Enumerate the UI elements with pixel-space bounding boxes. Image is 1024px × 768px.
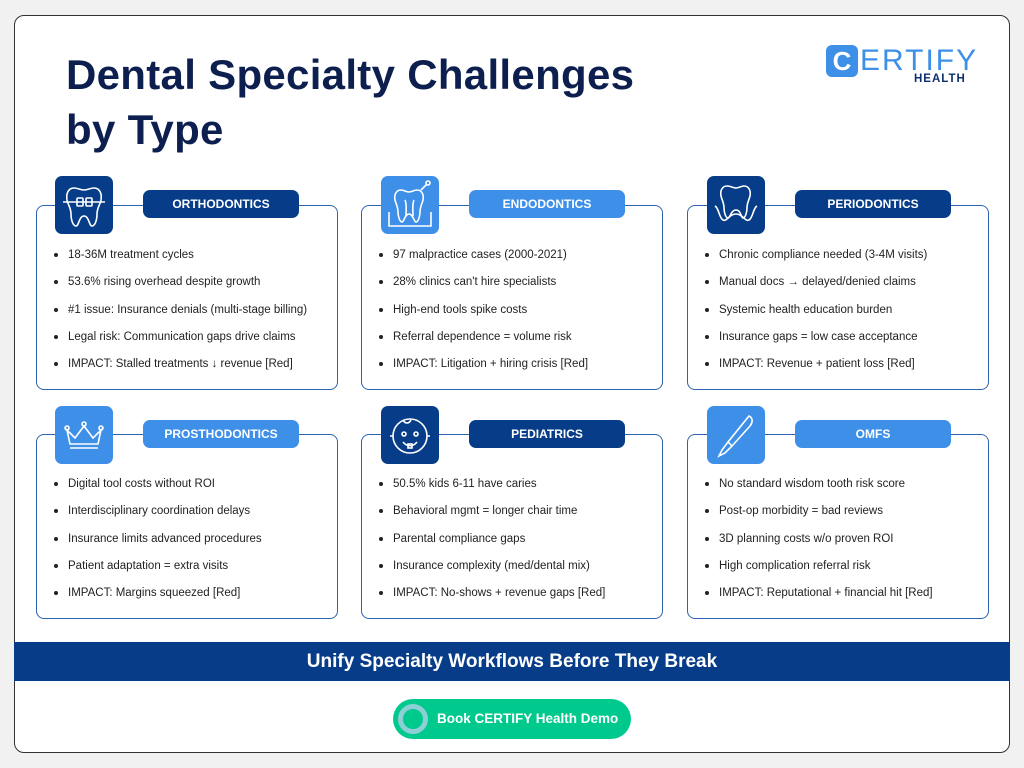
panel: pediatrics: Behavioral mgmt = longer chair time [393,505,577,517]
logo [826,44,978,85]
panel: endodontics [361,205,663,390]
icon: crown [55,406,113,464]
pill: prosthodontics [143,420,299,448]
icon: braces tooth [55,176,113,234]
pill: orthodontics: ORTHODONTICS [172,197,270,211]
panel: periodontics: Manual docs → delayed/denied claims [719,276,916,288]
panel: prosthodontics [36,434,338,619]
panel: OMFS: Post-op morbidity = bad reviews [719,505,883,517]
icon: scalpel [707,406,765,464]
banner: Unify Specialty Workflows Before They Break [307,651,717,672]
title [66,51,634,153]
panel: endodontics: High-end tools spike costs [393,304,527,316]
panel: orthodontics [36,205,338,390]
logo: HEALTH [914,73,966,85]
panel: prosthodontics: Insurance limits advanced procedures [68,533,262,545]
pill: endodontics: ENDODONTICS [503,197,591,211]
panel: orthodontics: 18-36M treatment cycles [68,249,194,261]
panel: OMFS: 3D planning costs w/o proven ROI [719,533,894,545]
pill: orthodontics [143,190,299,218]
pill: pediatrics: PEDIATRICS [511,427,583,441]
panel: periodontics: IMPACT: Revenue + patient loss [Red] [719,358,915,370]
panel: OMFS: No standard wisdom tooth risk score [719,478,905,490]
icon: root canal [381,176,439,234]
panel: pediatrics: Insurance complexity (med/dental mix) [393,560,590,572]
title: Dental Specialty Challenges [66,51,634,98]
panel: OMFS [687,434,989,619]
panel: endodontics: Referral dependence = volume risk [393,331,572,343]
panel: periodontics: Systemic health education burden [719,304,892,316]
panel: endodontics: 28% clinics can't hire specialists [393,276,556,288]
pill: endodontics [469,190,625,218]
panel: prosthodontics: IMPACT: Margins squeezed [Red] [68,587,240,599]
panel: periodontics: Insurance gaps = low case acceptance [719,331,918,343]
pill: OMFS: OMFS [856,427,890,441]
panel: pediatrics [361,434,663,619]
panel: pediatrics: Parental compliance gaps [393,533,525,545]
banner [14,642,1010,681]
panel: prosthodontics: Interdisciplinary coordination delays [68,505,250,517]
panel: orthodontics: Legal risk: Communication gaps drive claims [68,331,296,343]
pill: pediatrics [469,420,625,448]
button: book demo [393,699,631,739]
panel: prosthodontics: Digital tool costs without ROI [68,478,215,490]
panel: OMFS: High complication referral risk [719,560,870,572]
title: by Type [66,106,224,153]
panel: orthodontics: 53.6% rising overhead despite growth [68,276,260,288]
panel: prosthodontics: Patient adaptation = extra visits [68,560,228,572]
panel: endodontics: 97 malpractice cases (2000-2021) [393,249,567,261]
icon: gum tooth [707,176,765,234]
panel: OMFS: IMPACT: Reputational + financial hit [Red] [719,587,933,599]
icon: child face [381,406,439,464]
button: book demo: Book CERTIFY Health Demo [437,711,618,726]
panel: orthodontics: #1 issue: Insurance denials (multi-stage billing) [68,304,307,316]
logo: C [833,46,851,76]
pill: periodontics: PERIODONTICS [827,197,919,211]
pill: prosthodontics: PROSTHODONTICS [164,427,278,441]
panel: pediatrics: IMPACT: No-shows + revenue gaps [Red] [393,587,605,599]
panel: periodontics [687,205,989,390]
panel: periodontics: Chronic compliance needed (3-4M visits) [719,249,927,261]
panel: orthodontics: IMPACT: Stalled treatments ↓ revenue [Red] [68,358,293,370]
panel: endodontics: IMPACT: Litigation + hiring crisis [Red] [393,358,588,370]
pill: OMFS [795,420,951,448]
panel: pediatrics: 50.5% kids 6-11 have caries [393,478,537,490]
pill: periodontics [795,190,951,218]
logo: ERTIFY [860,44,978,77]
